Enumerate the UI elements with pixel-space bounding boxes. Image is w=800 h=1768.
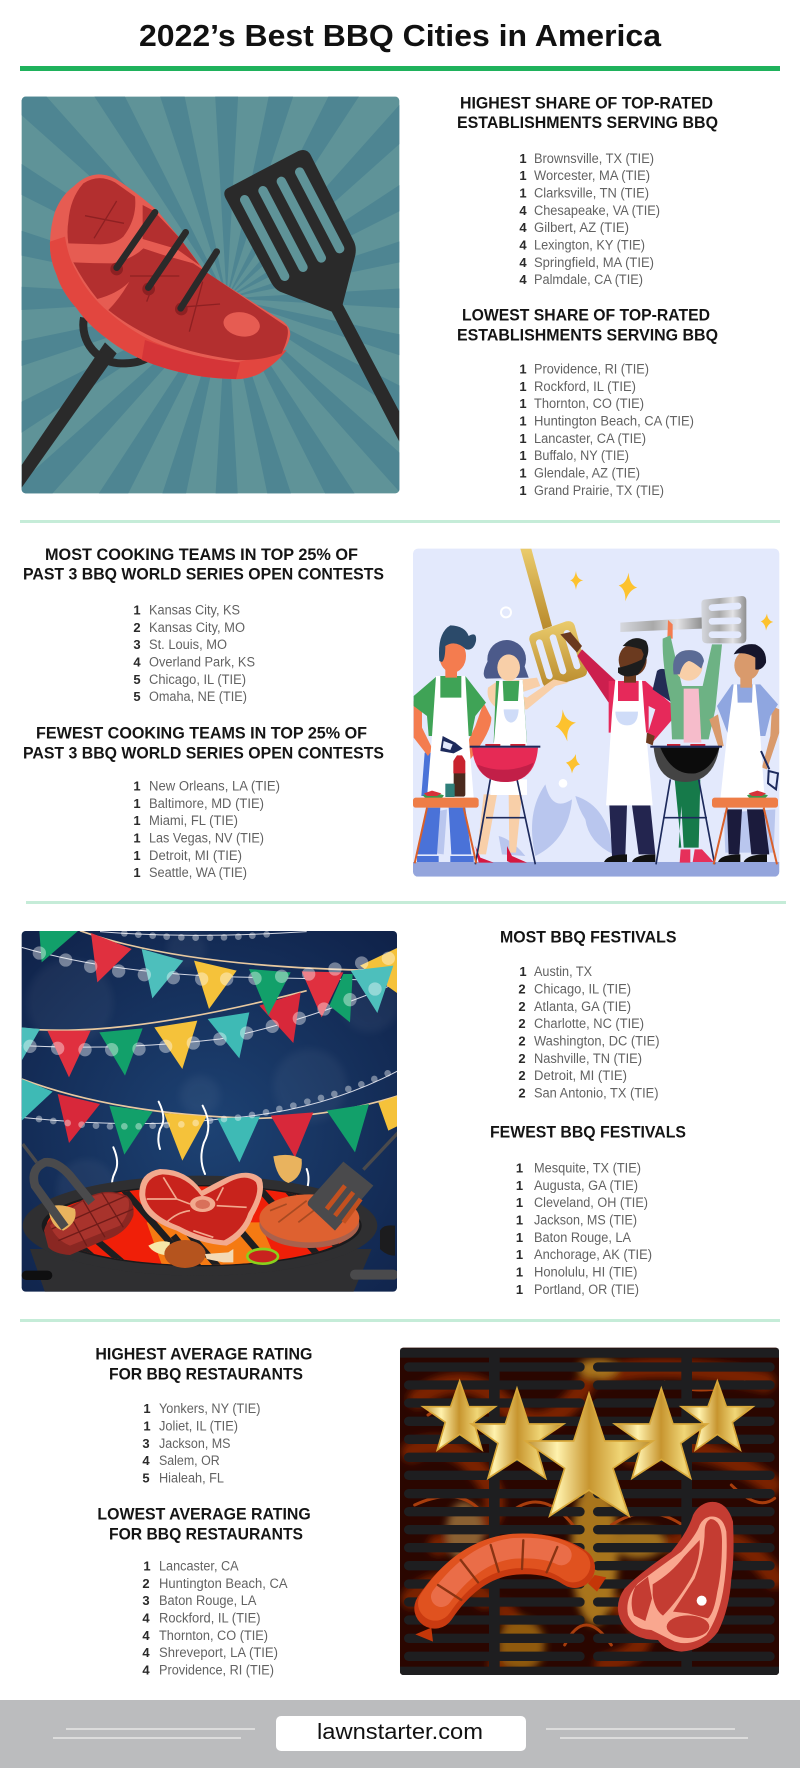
list: lowest rating: 3 [142, 1593, 150, 1608]
list: most festivals: Nashville, TN (TIE) [534, 1051, 642, 1066]
heading: lowest rating: FOR BBQ RESTAURANTS [109, 1526, 303, 1544]
list: lowest rating: 4 [142, 1662, 150, 1678]
list: fewest cooking teams: 1 [133, 778, 141, 794]
list: lowest rating: 4 [142, 1628, 150, 1643]
list: most festivals: 2 [518, 1051, 526, 1066]
list: lowest share: 1 [519, 396, 527, 411]
list: fewest cooking teams: 1 [133, 865, 141, 880]
table right [712, 791, 778, 864]
title: 2022’s Best BBQ Cities in America [139, 18, 662, 53]
list: highest share: 1 [519, 168, 527, 183]
list: lowest share: Huntington Beach, CA (TIE) [534, 414, 694, 428]
heading: fewest cooking teams [23, 724, 384, 762]
list: fewest festivals: Honolulu, HI (TIE) [534, 1264, 638, 1280]
list: lowest rating: Providence, RI (TIE) [159, 1662, 274, 1678]
list: highest share: Palmdale, CA (TIE) [534, 272, 643, 287]
list: fewest cooking teams: Miami, FL (TIE) [149, 813, 238, 828]
steam [112, 1102, 309, 1192]
list: highest rating: Salem, OR [159, 1453, 220, 1468]
list: most festivals: Detroit, MI (TIE) [534, 1068, 627, 1083]
list: most festivals: 2 [518, 982, 526, 996]
list: most cooking teams: 5 [133, 689, 141, 704]
person 5 [709, 644, 779, 862]
footer band [0, 1700, 800, 1768]
list: lowest rating: Rockford, IL (TIE) [159, 1610, 260, 1626]
list: highest share: Worcester, MA (TIE) [534, 168, 650, 183]
list: lowest share: Lancaster, CA (TIE) [534, 431, 646, 446]
list: most cooking teams: Omaha, NE (TIE) [149, 689, 247, 704]
list: lowest rating: 2 [142, 1576, 150, 1591]
icon: sausage [415, 1540, 606, 1642]
list: fewest festivals: 1 [516, 1160, 523, 1176]
meats on grill [44, 1155, 359, 1268]
list: highest rating: 3 [142, 1436, 150, 1451]
list: most festivals: 2 [518, 1016, 526, 1031]
list: most cooking teams: 3 [133, 637, 141, 652]
heading: lowest share [457, 306, 718, 344]
heading: lowest rating: LOWEST AVERAGE RATING [97, 1506, 311, 1524]
list: fewest festivals: Portland, OR (TIE) [534, 1282, 639, 1297]
list: fewest cooking teams: 1 [133, 830, 141, 846]
grill bars [400, 1348, 779, 1675]
list: lowest share: 1 [519, 414, 527, 428]
sparkles [555, 571, 773, 773]
list: lowest share: Rockford, IL (TIE) [534, 379, 636, 394]
heading: most cooking teams: PAST 3 BBQ WORLD SERIES OPEN CONTESTS [23, 566, 384, 584]
illustration: steak and spatula [22, 96, 400, 494]
list: lowest share: 1 [519, 379, 527, 394]
list: fewest cooking teams: Seattle, WA (TIE) [149, 865, 247, 880]
heading: highest share: ESTABLISHMENTS SERVING BBQ [457, 114, 718, 132]
list: fewest cooking teams [133, 778, 280, 880]
icon: fork [22, 318, 149, 488]
table with bottle [413, 755, 479, 863]
list: lowest rating: 1 [143, 1558, 151, 1574]
list: highest share [519, 151, 660, 287]
heading: fewest cooking teams: FEWEST COOKING TEAMS IN TOP 25% OF [36, 724, 367, 742]
list: highest share: Clarksville, TN (TIE) [534, 186, 649, 200]
list: highest share: 4 [519, 203, 527, 218]
list: most cooking teams: Kansas City, KS [149, 602, 240, 618]
list: fewest festivals: 1 [516, 1195, 523, 1210]
heading: highest share: HIGHEST SHARE OF TOP-RATED [460, 94, 713, 112]
list: most festivals: Chicago, IL (TIE) [534, 982, 631, 996]
list: highest rating: Jackson, MS [159, 1436, 230, 1451]
list: highest rating: Hialeah, FL [159, 1470, 224, 1486]
list: most festivals: 2 [518, 1034, 526, 1048]
list: fewest cooking teams: 1 [133, 813, 141, 828]
icon: black grill [650, 744, 722, 864]
list: highest share: 4 [519, 238, 527, 252]
list: lowest share: Thornton, CO (TIE) [534, 396, 644, 411]
list: highest share: 4 [519, 220, 527, 235]
list: highest rating: 1 [143, 1418, 151, 1434]
person 3 [560, 632, 675, 862]
footer url: lawnstarter.com [317, 1719, 483, 1744]
list: most festivals: Washington, DC (TIE) [534, 1034, 660, 1048]
list: most cooking teams: 4 [133, 654, 141, 670]
list: highest share: 1 [519, 151, 527, 166]
icon: gold spatula [520, 549, 587, 688]
list: highest share: Lexington, KY (TIE) [534, 238, 645, 252]
list: fewest festivals: 1 [516, 1247, 523, 1262]
list: fewest festivals: 1 [516, 1230, 523, 1245]
list: fewest festivals: 1 [516, 1264, 523, 1280]
list: fewest festivals [516, 1160, 652, 1297]
illustration: grill under bunting [22, 929, 400, 1292]
bunting flags [22, 931, 398, 1162]
list: fewest cooking teams: 1 [133, 796, 141, 811]
icon: grey spatula [308, 1132, 398, 1231]
list: fewest festivals: 1 [516, 1212, 523, 1228]
list: lowest share: Providence, RI (TIE) [534, 362, 649, 376]
list: highest share: 1 [519, 186, 527, 200]
grill body [22, 1176, 398, 1292]
list: highest share: Brownsville, TX (TIE) [534, 151, 654, 166]
list: most cooking teams: Kansas City, MO [149, 620, 245, 635]
heading: lowest share: ESTABLISHMENTS SERVING BBQ [457, 326, 718, 344]
heading: highest rating [95, 1345, 312, 1383]
list: most cooking teams: 1 [133, 602, 141, 618]
list: lowest rating: Lancaster, CA [159, 1558, 239, 1574]
heading: most cooking teams [23, 546, 384, 584]
list: fewest festivals: Baton Rouge, LA [534, 1230, 631, 1245]
list: fewest cooking teams: Baltimore, MD (TIE) [149, 796, 264, 811]
person 4 [653, 620, 722, 863]
list: fewest cooking teams: New Orleans, LA (TIE) [149, 778, 280, 794]
list: fewest festivals: Augusta, GA (TIE) [534, 1178, 638, 1193]
list: lowest share: Buffalo, NY (TIE) [534, 448, 629, 463]
list: fewest cooking teams: Las Vegas, NV (TIE) [149, 830, 264, 846]
list: lowest share: 1 [519, 466, 527, 480]
string lights [23, 930, 395, 1130]
person 2 [475, 640, 569, 863]
list: fewest festivals: Anchorage, AK (TIE) [534, 1247, 652, 1262]
list: fewest festivals: Mesquite, TX (TIE) [534, 1160, 641, 1176]
icon: grilling fork [23, 1144, 92, 1227]
heading: highest rating: FOR BBQ RESTAURANTS [109, 1365, 303, 1383]
list: highest rating: 5 [142, 1470, 150, 1486]
list: lowest rating: Thornton, CO (TIE) [159, 1628, 268, 1643]
heading: most cooking teams: MOST COOKING TEAMS IN TOP 25% OF [45, 546, 358, 564]
list: highest share: Gilbert, AZ (TIE) [534, 220, 629, 235]
list: lowest share: Grand Prairie, TX (TIE) [534, 483, 664, 498]
list: most cooking teams: St. Louis, MO [149, 637, 227, 652]
list: most cooking teams [133, 602, 255, 704]
list: fewest cooking teams: Detroit, MI (TIE) [149, 848, 242, 863]
person 1 [414, 625, 491, 862]
list: most cooking teams: 5 [133, 672, 141, 687]
list: fewest festivals: 1 [516, 1178, 523, 1193]
heading: lowest share: LOWEST SHARE OF TOP-RATED [462, 306, 710, 324]
heading: fewest cooking teams: PAST 3 BBQ WORLD SERIES OPEN CONTESTS [23, 744, 384, 762]
heading: fewest festivals: FEWEST BBQ FESTIVALS [490, 1124, 686, 1142]
list: highest share: Springfield, MA (TIE) [534, 255, 654, 270]
list: highest rating: 4 [142, 1453, 150, 1468]
list: lowest share: 1 [519, 448, 527, 463]
list: most cooking teams: Chicago, IL (TIE) [149, 672, 246, 687]
list: most festivals [518, 964, 660, 1100]
list: most festivals: 2 [518, 1086, 526, 1100]
list: fewest cooking teams: 1 [133, 848, 141, 863]
list: highest rating: Joliet, IL (TIE) [159, 1418, 238, 1434]
list: fewest festivals: 1 [516, 1282, 523, 1297]
list: highest share: 4 [519, 272, 527, 287]
illustration: people grilling [413, 549, 779, 877]
list: lowest rating: 4 [142, 1610, 150, 1626]
list: lowest rating [142, 1558, 288, 1678]
list: most festivals: 2 [518, 1068, 526, 1083]
list: most festivals: Austin, TX [534, 964, 592, 979]
list: fewest festivals: Jackson, MS (TIE) [534, 1212, 637, 1228]
list: most festivals: Charlotte, NC (TIE) [534, 1016, 644, 1031]
heading: lowest rating [97, 1506, 311, 1544]
heading: most festivals: MOST BBQ FESTIVALS [500, 928, 676, 946]
heading: highest share [457, 94, 718, 132]
list: most festivals: Atlanta, GA (TIE) [534, 999, 631, 1014]
fire background [411, 1358, 775, 1672]
list: highest share: Chesapeake, VA (TIE) [534, 203, 660, 218]
icon: steak [50, 174, 290, 379]
list: most festivals: 1 [519, 964, 527, 979]
list: most festivals: San Antonio, TX (TIE) [534, 1086, 658, 1100]
list: highest share: 4 [519, 255, 527, 270]
icon: spatula [224, 150, 399, 442]
list: lowest rating: Baton Rouge, LA [159, 1593, 256, 1608]
list: lowest share: 1 [519, 362, 527, 376]
list: lowest share: Glendale, AZ (TIE) [534, 466, 640, 480]
list: lowest rating: Shreveport, LA (TIE) [159, 1645, 278, 1660]
list: lowest rating: Huntington Beach, CA [159, 1576, 288, 1591]
list: highest rating: 1 [143, 1401, 151, 1416]
list: lowest rating: 4 [142, 1645, 150, 1660]
list: most cooking teams: 2 [133, 620, 141, 635]
icon: raw steak [618, 1502, 734, 1652]
list: lowest share [519, 362, 694, 498]
list: most cooking teams: Overland Park, KS [149, 654, 255, 670]
list: fewest festivals: Cleveland, OH (TIE) [534, 1195, 648, 1210]
icon: five gold stars [423, 1381, 753, 1516]
icon: red grill [470, 744, 540, 864]
list: lowest share: 1 [519, 483, 527, 498]
illustration: stars and meat on grill [400, 1348, 779, 1675]
heading: highest rating: HIGHEST AVERAGE RATING [95, 1345, 312, 1363]
list: most festivals: 2 [518, 999, 526, 1014]
list: highest rating [142, 1401, 260, 1486]
list: lowest share: 1 [519, 431, 527, 446]
icon: silver spatula [620, 596, 746, 643]
list: highest rating: Yonkers, NY (TIE) [159, 1401, 260, 1416]
